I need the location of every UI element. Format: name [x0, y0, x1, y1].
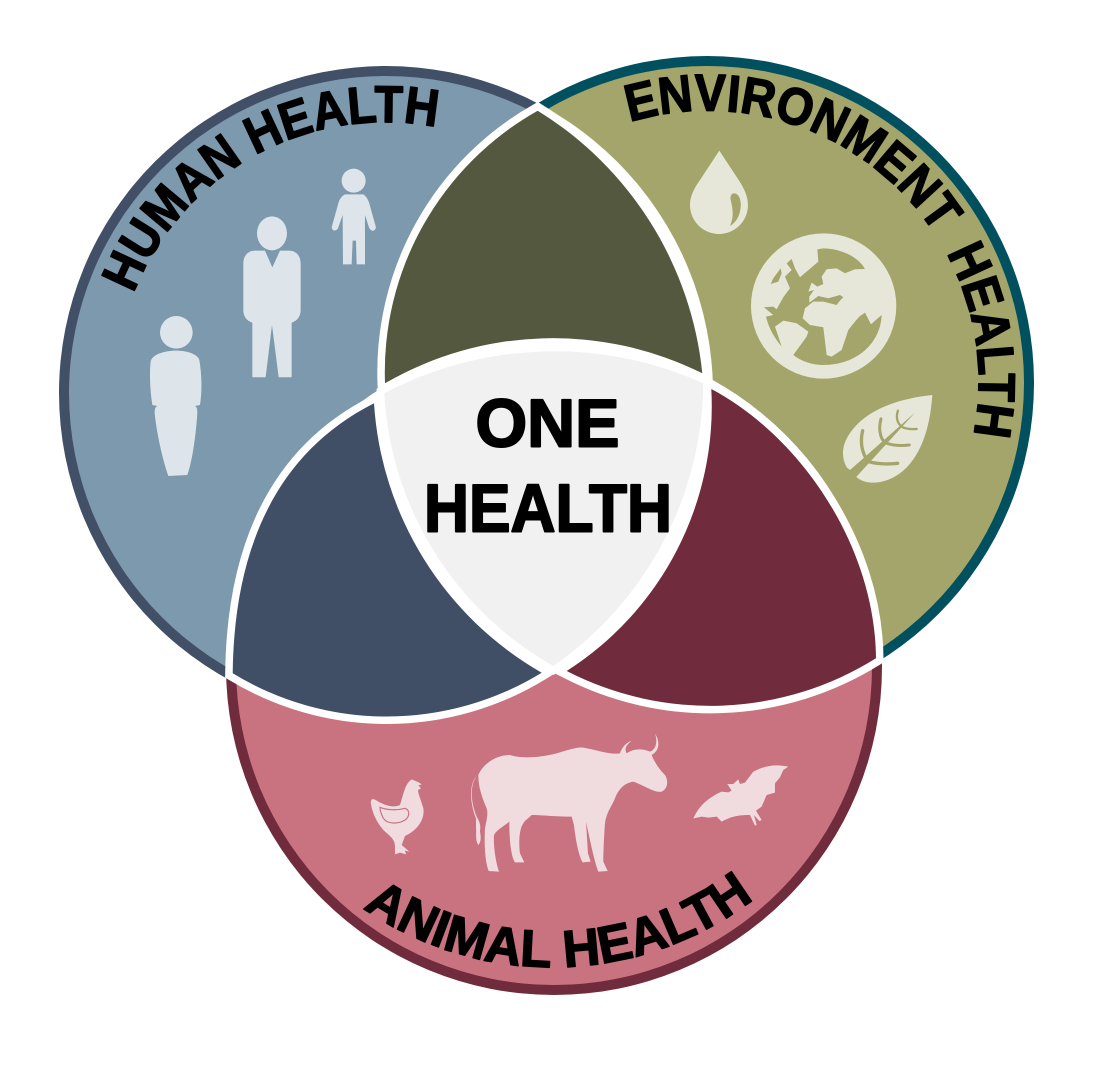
icon: man [243, 216, 301, 377]
white outline: overlap bands [225, 102, 884, 724]
icon: cow [471, 733, 667, 872]
title: one health: ONE [476, 386, 620, 462]
icon: woman [150, 316, 201, 476]
overlap: human and environment [385, 111, 702, 383]
heading: human health: HUMAN HEALTH [101, 86, 439, 292]
centre region [384, 351, 703, 666]
overlap: human and animal [233, 403, 542, 717]
overlap: environment and animal [567, 389, 876, 706]
heading: animal health: ANIMAL HEALTH [363, 870, 752, 968]
panel: human health circle [59, 66, 713, 720]
heading: environment health: ENVIRONMENT HEALTH [624, 74, 1016, 438]
icon: globe [751, 233, 896, 379]
panel: environment health circle [380, 56, 1034, 710]
icon: leaf [843, 395, 932, 483]
icon: water drop [690, 151, 748, 234]
one health venn diagram [59, 56, 1034, 995]
title: one health [424, 386, 672, 546]
icon: child [332, 169, 376, 264]
icon: chicken [371, 779, 424, 854]
panel: animal health circle [226, 339, 882, 995]
icon: bat [693, 765, 788, 826]
title: one health: HEALTH [424, 470, 672, 546]
